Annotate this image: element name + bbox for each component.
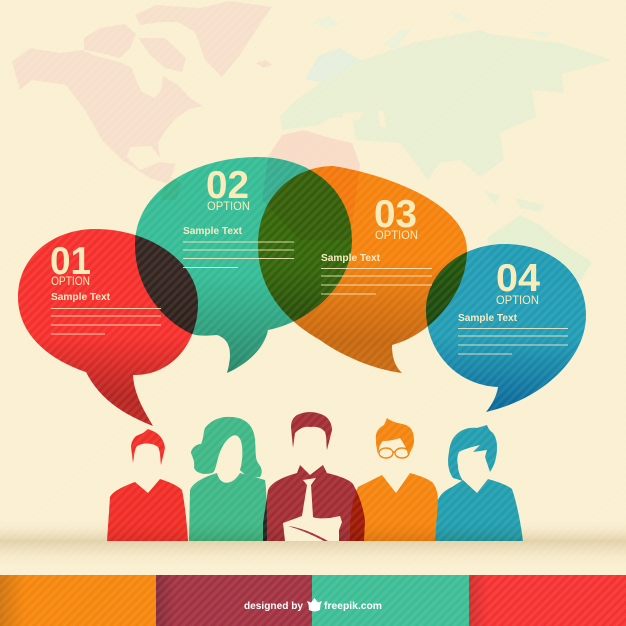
map: scandinavia <box>305 48 360 82</box>
text lines <box>458 328 568 354</box>
person 2 teal <box>189 417 267 541</box>
bubble 02 text <box>183 164 294 268</box>
sample text: Sample Text <box>458 312 517 324</box>
crossed arms and tie cutout <box>283 478 342 541</box>
maroon segment <box>156 575 313 626</box>
sample text: Sample Text <box>51 291 110 303</box>
option label: OPTION <box>51 276 90 288</box>
orange segment <box>0 575 157 626</box>
bubble 01 text <box>50 240 161 334</box>
hair <box>191 417 262 477</box>
map: australia <box>487 215 592 290</box>
map: eurasia <box>280 30 612 180</box>
body <box>350 473 438 541</box>
speech bubble shape 03 <box>258 166 467 373</box>
option label: OPTION <box>496 295 539 307</box>
text lines <box>183 242 294 268</box>
body <box>263 465 365 541</box>
person 5 blue <box>435 425 523 541</box>
number 02: 02 <box>206 164 249 207</box>
sample text: Sample Text <box>321 252 380 264</box>
person 4 orange <box>350 418 438 541</box>
speech bubble shape 02 <box>135 157 352 373</box>
sample text: Sample Text <box>183 225 242 237</box>
speech bubble shape 01 <box>18 229 198 426</box>
map: arctic islands <box>312 12 550 50</box>
person 1 red <box>107 429 188 541</box>
map: south east asia islands <box>484 190 545 212</box>
map: africa <box>262 130 360 240</box>
body <box>435 479 523 541</box>
speech bubble shape 04 <box>426 244 586 412</box>
tie and arms <box>283 478 342 541</box>
number 03: 03 <box>374 193 417 236</box>
floor shadow <box>0 518 626 571</box>
option label: OPTION <box>207 201 250 213</box>
glasses <box>379 448 409 458</box>
colour bar <box>0 575 626 626</box>
text lines <box>51 308 161 334</box>
hair <box>131 429 165 465</box>
bubble 04 text <box>458 257 568 354</box>
map: south america <box>160 177 182 200</box>
number 04: 04 <box>496 257 540 300</box>
freepik.com: freepik.com <box>324 600 382 612</box>
map: arctic islands of canada <box>84 24 186 72</box>
teal segment <box>312 575 470 626</box>
world map <box>12 1 612 290</box>
body <box>189 473 267 541</box>
bubble 03 text <box>321 193 432 294</box>
number 01: 01 <box>50 240 91 283</box>
hair <box>291 412 332 450</box>
arm fold line <box>288 526 328 541</box>
text lines <box>321 268 432 294</box>
option label: OPTION <box>375 230 418 242</box>
hair <box>376 418 414 455</box>
person 3 maroon <box>263 412 365 541</box>
hair <box>448 425 497 481</box>
map: north america <box>12 48 203 184</box>
icon: freepik crown <box>307 598 322 612</box>
body <box>107 479 188 541</box>
map: iceland <box>256 60 272 68</box>
red segment <box>469 575 626 626</box>
map: greenland <box>135 1 272 77</box>
map: inland seas <box>342 110 386 128</box>
footer credit <box>244 598 382 612</box>
designed by: designed by <box>244 600 303 612</box>
